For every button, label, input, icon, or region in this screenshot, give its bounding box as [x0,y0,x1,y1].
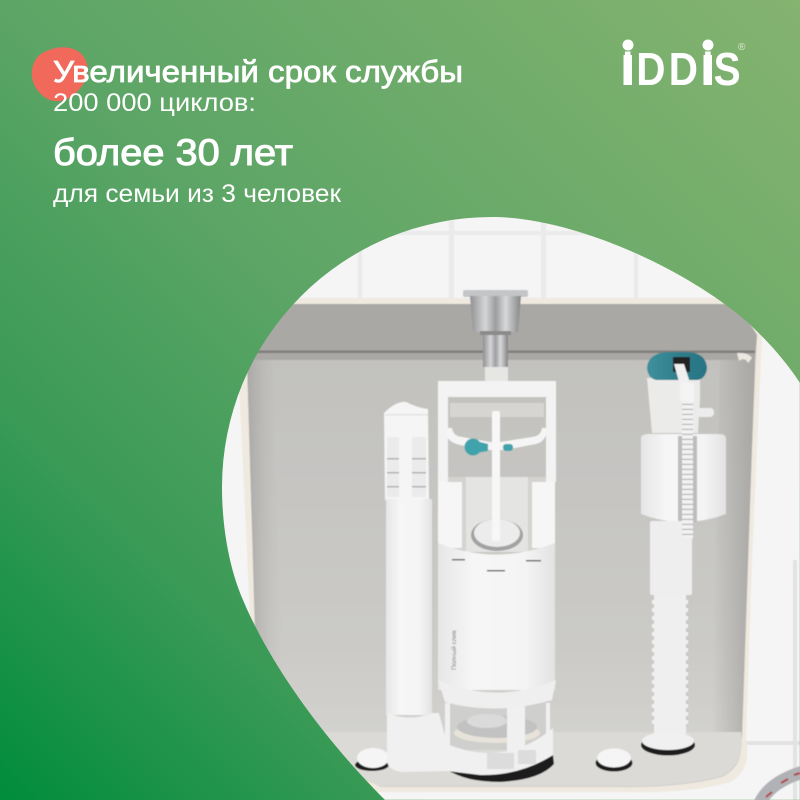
cylinder label: Полный слив [450,630,458,670]
threaded rod [682,398,693,538]
right guide [532,482,555,548]
frame crossbar [450,403,544,417]
foot [642,732,694,750]
photo: open toilet cistern in organic blob [200,200,800,800]
chrome button holder [463,290,528,381]
float channel [678,436,697,522]
white frame [438,381,556,482]
lever arms [447,428,547,450]
tube head with slots [384,402,429,500]
small cap near tube [355,748,389,771]
valve base and tube foot [387,713,553,775]
central rod [492,411,500,541]
rod clamp [680,383,694,401]
overflow tube [384,402,432,715]
wall tiles [200,200,800,800]
cistern shadow line [240,350,755,353]
logo: iDDiS: iDDiS [622,45,741,96]
float [641,434,726,522]
subheading: cycles: 200 000 циклов: [53,89,256,117]
caption: для семьи из 3 человек [53,180,342,208]
cap notch [673,357,690,372]
cistern shell rim [235,298,762,792]
main cylinder [438,543,555,690]
cage with float disc [444,702,550,751]
cistern back wall [247,360,755,732]
teal cap [647,352,707,380]
left guide [438,482,462,548]
blue bulb handle [464,438,513,456]
flush valve [387,290,556,782]
lever [673,363,690,381]
tube body [386,499,432,715]
key figure: более 30 лет [53,132,293,173]
logo: iDDiS: ® [738,42,746,53]
fill valve [641,352,726,756]
cistern left wall shading [247,360,268,648]
side nipple [697,408,714,417]
inner shaded cup [448,477,546,552]
foot gasket [641,734,695,756]
black gasket [446,755,554,782]
cistern right wall shading [720,360,755,738]
valve body [647,378,700,433]
cistern rear upper wall [240,304,757,360]
cylinder ring [438,680,556,709]
cistern floor [325,732,742,786]
cylinder marks [452,559,541,572]
coral accent blob [32,47,88,101]
shell clip hook [737,353,752,363]
cistern interior base [378,346,756,788]
inner valve mechanism [471,519,523,551]
braided hose [760,772,800,800]
heading: Увеличенный срок службы [53,54,463,89]
base windows [487,750,536,769]
toothed lower stem [652,595,688,735]
lower stem upper sleeve [650,521,692,595]
small white plug [596,748,632,772]
